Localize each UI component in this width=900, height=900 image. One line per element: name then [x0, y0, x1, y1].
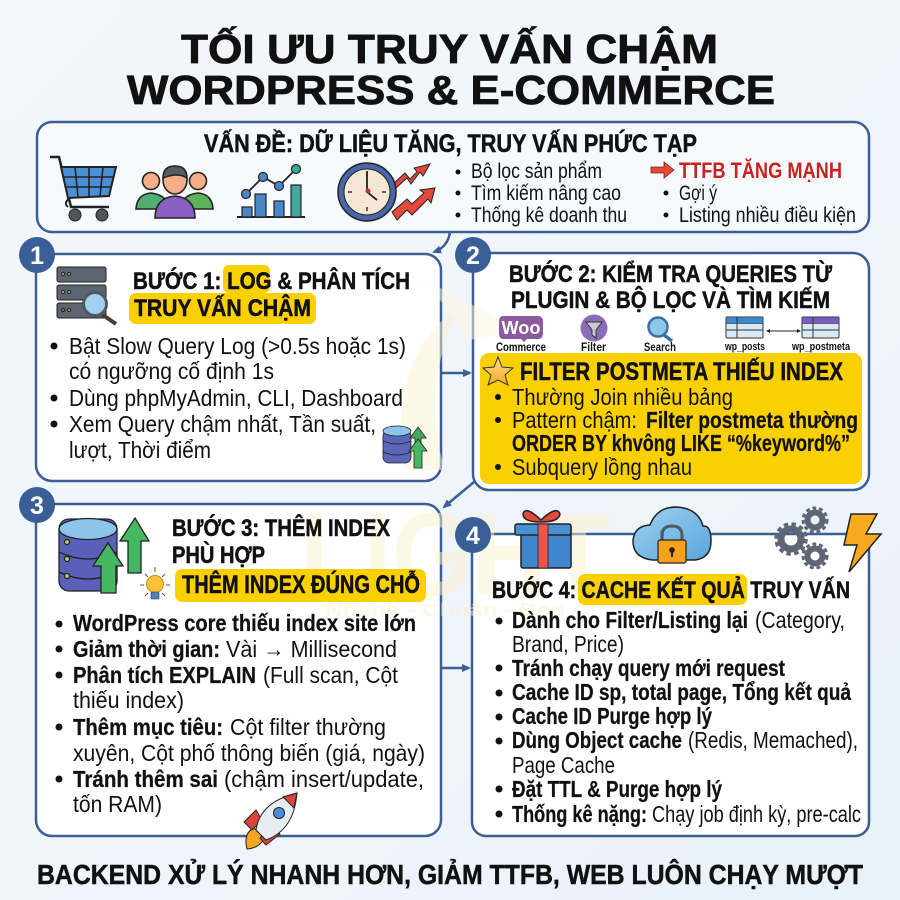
- heading: step 3: THÊM INDEX ĐÚNG CHỖ: [182, 569, 420, 599]
- watermark: Nhanh - Chuẩn - Đẹp: [325, 600, 565, 620]
- text: step 3 list: (Full scan, Cột: [263, 662, 399, 688]
- icon: filter: [580, 314, 608, 354]
- heading: problem: VẤN ĐỀ: DỮ LIỆU TĂNG, TRUY VẤN PHỨC TẠP: [204, 128, 697, 158]
- icon: bar and line chart: [237, 164, 305, 217]
- icon: clock with rising arrows: [338, 163, 435, 221]
- callout list: Thường Join nhiều bảng: [512, 384, 733, 410]
- text: step 3 list: thiếu index): [73, 687, 184, 713]
- text: step 4 list: Dành cho Filter/Listing lại: [512, 607, 748, 633]
- text: step 1 list: Xem Query chậm nhất, Tần suất,: [69, 411, 376, 437]
- icon: gears: [776, 508, 827, 568]
- icon: database table relation: wp_posts: [724, 341, 765, 353]
- badge 1: [19, 237, 55, 273]
- badge 1: 1: [30, 242, 44, 270]
- text: problem list right: TTFB TĂNG MẠNH: [679, 158, 842, 183]
- panel: step 1: [36, 254, 441, 481]
- title: TỐI ƯU TRUY VẤN CHẬM: [181, 26, 718, 72]
- heading: step 1: [129, 265, 410, 324]
- text: step 3 list: tốn RAM): [73, 791, 162, 817]
- text: step 4 list: Đặt TTL & Purge hợp lý: [512, 776, 722, 802]
- icon: database table relation: [724, 317, 851, 353]
- text: step 4 list: Dùng Object cache: [512, 727, 682, 753]
- text: step 3 list: Phân tích EXPLAIN: [73, 662, 256, 688]
- heading: step 1: BƯỚC 1: LOG & PHÂN TÍCH: [133, 267, 410, 295]
- title: WORDPRESS & E-COMMERCE: [127, 67, 775, 113]
- icon: gift box: [515, 511, 571, 568]
- text: step 3 list: Vài → Millisecond: [226, 636, 397, 662]
- badge 2: [455, 237, 491, 273]
- icon: WooCommerce: Commerce: [496, 340, 546, 354]
- text: step 3 list: Thêm mục tiêu:: [73, 714, 223, 740]
- text: step 4 list: Cache ID Purge hợp lý: [512, 703, 712, 729]
- panel: problem: [37, 122, 869, 232]
- heading: step 2: [509, 260, 832, 314]
- icon: filter: Filter: [581, 340, 606, 354]
- heading: step 3: BƯỚC 3: THÊM INDEX: [172, 514, 390, 542]
- text: step 4 list: (Redis, Memached),: [688, 727, 858, 753]
- text: problem list left: [456, 160, 627, 227]
- text: step 3 list: WordPress core thiếu index site lớn: [73, 610, 416, 636]
- text: step 1 list: Dùng phpMyAdmin, CLI, Dashboard: [69, 385, 403, 411]
- panel: step 3: [36, 504, 441, 836]
- badge 4: 4: [466, 522, 480, 550]
- callout list: [495, 384, 858, 480]
- badge 2: 2: [466, 242, 480, 270]
- text: step 3 list: xuyên, Cột phố thông biến (giá, ngày): [73, 740, 425, 766]
- arrow: step 3 to step 4: [441, 667, 469, 669]
- text: step 4 list: Thống kê nặng:: [512, 801, 647, 827]
- text: step 3 list: Tránh thêm sai: [73, 766, 218, 792]
- icon: small database with arrows: [383, 426, 427, 468]
- callout list: Filter postmeta thường: [646, 407, 858, 433]
- badge 3: [19, 487, 55, 523]
- callout list: Subquery lồng nhau: [512, 454, 692, 480]
- text: problem list left: Tìm kiếm nâng cao: [471, 182, 621, 205]
- arrow: step 2 to step 3: [444, 482, 474, 507]
- title: [127, 26, 775, 113]
- icon: rocket: [244, 793, 297, 849]
- heading: step 1: TRUY VẤN CHẬM: [134, 294, 311, 322]
- icon: server with magnifier: [57, 267, 116, 324]
- text: step 3 list: Cột filter thường: [230, 714, 386, 740]
- arrow: problem to step 1: [434, 232, 450, 252]
- text: step 1 list: [50, 333, 406, 463]
- icon: people: [136, 166, 213, 218]
- badge 3: 3: [30, 492, 44, 520]
- text: step 3 list: [56, 610, 425, 817]
- icon: lightning bolt: [844, 514, 881, 572]
- panel: step 4: [472, 534, 869, 836]
- text: step 4 list: Page Cache: [512, 752, 615, 778]
- icon: database table relation: wp_postmeta: [791, 341, 851, 353]
- badge 4: [455, 517, 491, 553]
- text: step 1 list: có ngưỡng cố định 1s: [69, 358, 274, 384]
- text: problem list left: Thống kê doanh thu: [471, 204, 627, 227]
- icon: WooCommerce: [496, 316, 546, 354]
- heading: step 2: PLUGIN & BỘ LỌC VÀ TÌM KIẾM: [511, 286, 830, 314]
- text: problem list right: Listing nhiều điều kiện: [679, 204, 856, 227]
- icon: database with green arrows: [59, 518, 149, 593]
- arrow: step 1 to step 2: [441, 372, 470, 374]
- text: problem list right: [651, 158, 856, 227]
- text: step 1 list: Bật Slow Query Log (>0.5s hoặc 1s): [69, 333, 406, 359]
- text: step 1 list: lượt, Thời điểm: [69, 437, 211, 463]
- icon: shopping cart: [50, 157, 116, 221]
- text: problem list right: Gợi ý: [679, 182, 717, 205]
- text: step 3 list: Giảm thời gian:: [73, 636, 220, 662]
- text: problem list left: Bộ lọc sản phẩm: [471, 160, 602, 183]
- panel: step 2: [473, 253, 869, 490]
- icon: search: Search: [644, 340, 676, 354]
- icon: WooCommerce: Woo: [502, 318, 541, 338]
- heading: step 2: BƯỚC 2: KIỂM TRA QUERIES TỪ: [509, 260, 832, 288]
- watermark: LIGHT: [300, 489, 610, 621]
- text: step 4 list: (Category,: [755, 607, 845, 633]
- watermark: [300, 280, 610, 621]
- text: step 4 list: Brand, Price): [512, 631, 624, 657]
- icon: search: [644, 318, 676, 354]
- icon: cloud with padlock: [633, 507, 711, 563]
- text: step 4 list: [496, 607, 861, 827]
- icon: star: [483, 357, 513, 385]
- icon: light bulb: [140, 567, 170, 599]
- heading: step 3: [172, 514, 426, 602]
- callout list: Pattern chậm:: [512, 407, 637, 433]
- text: step 4 list: Tránh chạy query mới request: [512, 655, 785, 681]
- text: step 3 list: (chậm insert/update,: [224, 766, 424, 792]
- callout: filter postmeta: [480, 353, 862, 484]
- heading: step 3: PHÙ HỢP: [172, 541, 265, 569]
